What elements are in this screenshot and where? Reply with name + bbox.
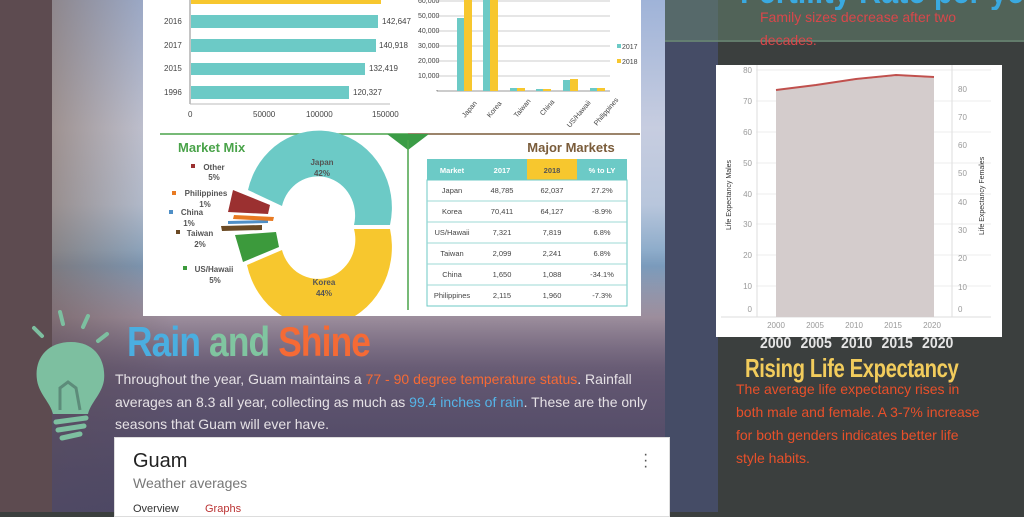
donut chart: market mix: China: [181, 208, 204, 217]
weather card: Weather averages: [133, 475, 247, 491]
donut chart: market mix: 42%: [314, 169, 330, 178]
table: major markets: Major Markets: [527, 140, 615, 155]
weather card: Guam: [133, 450, 187, 472]
table: major markets: 1,650: [493, 270, 511, 279]
column chart: major markets: China: [539, 99, 556, 117]
weather card: ·: [643, 446, 648, 463]
column chart: major markets: -: [436, 88, 439, 95]
donut chart: market mix: Philippines: [185, 189, 228, 198]
table: major markets: 2,115: [493, 291, 511, 300]
bar chart: arrivals by year: 100000: [306, 110, 333, 119]
table: major markets: 7,819: [543, 228, 561, 237]
left strip: [0, 0, 52, 512]
table: major markets: -34.1%: [590, 270, 614, 279]
column chart: major markets: 2018: [622, 59, 638, 66]
table: major markets: 62,037: [541, 186, 563, 195]
table: major markets: 2,241: [543, 249, 561, 258]
donut chart: market mix: 5%: [209, 276, 221, 285]
column chart: major markets: Korea: [486, 100, 504, 119]
background beach photo: [52, 0, 665, 512]
table: major markets: 7,321: [493, 228, 511, 237]
donut chart: market mix: Korea: [313, 278, 336, 287]
table: major markets: China: [442, 270, 463, 279]
table: major markets: 70,411: [491, 207, 513, 216]
chart: life expectancy: 40: [958, 198, 967, 207]
text: life expectancy description: style habits.: [736, 450, 810, 466]
bar chart: arrivals by year: [164, 0, 411, 119]
column chart: major markets: 2017: [622, 44, 638, 51]
donut chart: market mix: 5%: [208, 173, 220, 182]
text: life expectancy description: both male and female. A 3-7% increase: [736, 404, 980, 420]
table: major markets: -7.3%: [592, 291, 612, 300]
table: major markets: 2018: [544, 166, 560, 175]
column chart: major markets: 20,000: [418, 58, 440, 65]
bar chart: arrivals by year: 2017: [164, 41, 182, 50]
panel: tourism charts: [143, 0, 641, 316]
chart: life expectancy: 70: [743, 97, 753, 106]
chart: life expectancy: Life Expectancy Females: [979, 156, 986, 235]
weather card: Graphs: [205, 503, 241, 515]
chart: life expectancy: 10: [958, 283, 967, 292]
chart: life expectancy: 60: [743, 128, 753, 137]
chart: life expectancy: 2015: [884, 321, 902, 330]
table: major markets: 2017: [494, 166, 510, 175]
text: life expectancy description: [736, 381, 980, 466]
table: major markets: Market: [440, 166, 465, 175]
donut chart: market mix: Other: [203, 163, 225, 172]
text: life expectancy description: The average life expectancy rises in: [736, 381, 959, 397]
table: major markets: US/Hawaii: [434, 228, 470, 237]
header band: [665, 0, 1024, 42]
chart: life expectancy: 0: [958, 305, 963, 314]
table: major markets: Taiwan: [440, 249, 464, 258]
chart: life expectancy: 20: [743, 251, 753, 260]
chart: life expectancy: 50: [958, 169, 967, 178]
donut chart: market mix: 1%: [183, 219, 195, 228]
chart: life expectancy: 2005: [806, 321, 824, 330]
donut chart: market mix: US/Hawaii: [195, 265, 233, 274]
chart: life expectancy: 10: [743, 282, 753, 291]
table: major markets: 6.8%: [593, 228, 611, 237]
table: major markets: 1,960: [543, 291, 561, 300]
chart: life expectancy: 2000: [767, 321, 785, 330]
table: major markets: Philippines: [434, 291, 470, 300]
table: major markets: Korea: [442, 207, 463, 216]
table: major markets: 1,088: [543, 270, 561, 279]
bar chart: arrivals by year: 142,647: [382, 17, 411, 26]
bar chart: arrivals by year: 120,327: [353, 88, 382, 97]
chart: life expectancy: Life Expectancy Males: [726, 159, 733, 230]
donut chart: market mix: 2%: [194, 240, 206, 249]
icon: lightbulb: [32, 310, 110, 440]
weather card: ·: [643, 458, 648, 475]
text: life expectancy description: for both genders indicates better life: [736, 427, 959, 443]
column chart: major markets: Taiwan: [513, 98, 533, 119]
table: major markets: [427, 140, 627, 306]
weather card: Overview: [133, 503, 179, 515]
title: rain and shine: Rain and Shine: [127, 318, 370, 365]
donut chart: market mix: Market Mix: [178, 140, 246, 155]
bar chart: arrivals by year: 2016: [164, 17, 182, 26]
column chart: major markets: 10,000: [418, 73, 440, 80]
bar chart: arrivals by year: 140,918: [379, 41, 408, 50]
text: family sizes: Family sizes decrease after two: [760, 9, 956, 25]
chart: life expectancy: 80: [958, 85, 967, 94]
chart: life expectancy: 80: [743, 66, 753, 75]
text: family sizes: decades.: [760, 32, 817, 48]
bar chart: arrivals by year: 1996: [164, 88, 182, 97]
chart: life expectancy: 70: [958, 113, 967, 122]
chart: life expectancy: 40: [743, 190, 753, 199]
donut chart: market mix: 1%: [199, 200, 211, 209]
chart: life expectancy: 30: [743, 220, 753, 229]
table: major markets: Japan: [442, 186, 462, 195]
weather card: ·: [643, 452, 648, 469]
chart: life expectancy: 2010: [845, 321, 863, 330]
text: family sizes: [760, 9, 956, 48]
bar chart: arrivals by year: 2015: [164, 64, 182, 73]
column chart: major markets: [418, 0, 638, 129]
donut chart: market mix: [169, 131, 392, 327]
chart: life expectancy: 60: [958, 141, 967, 150]
table: major markets: 2,099: [493, 249, 511, 258]
column chart: major markets: 30,000: [418, 43, 440, 50]
title: rising life expectancy: Rising Life Expectancy: [745, 353, 958, 383]
column chart: major markets: Japan: [461, 100, 479, 119]
column chart: major markets: 40,000: [418, 28, 440, 35]
axis years label: 2000 2005 2010 2015 2020: [760, 335, 953, 352]
table: major markets: 48,785: [491, 186, 513, 195]
right slate column: [665, 0, 718, 512]
chart: life expectancy: 0: [748, 305, 753, 314]
bar chart: arrivals by year: 150000: [372, 110, 399, 119]
donut chart: market mix: 44%: [316, 289, 332, 298]
column chart: major markets: US/Hawaii: [566, 99, 593, 129]
bar chart: arrivals by year: 0: [188, 110, 193, 119]
text: climate description: Throughout the year, Guam maintains a 77 - 90 degree temperature status. Rainfall averages an 8.3 all year, collecting as much as 99.4 inches of rain. These are the only seasons that Guam will ever have.: [115, 371, 647, 432]
chart: life expectancy: 50: [743, 159, 753, 168]
column chart: major markets: Philippines: [593, 96, 621, 127]
right dark panel: [718, 0, 1024, 512]
chart: life expectancy: 2020: [923, 321, 941, 330]
weather card: [114, 437, 670, 517]
table: major markets: 64,127: [541, 207, 563, 216]
bar chart: arrivals by year: 50000: [253, 110, 276, 119]
donut chart: market mix: Taiwan: [187, 229, 213, 238]
chart: life expectancy: 20: [958, 254, 967, 263]
table: major markets: 6.8%: [593, 249, 611, 258]
chart: life expectancy: 30: [958, 226, 967, 235]
donut chart: market mix: Japan: [310, 158, 334, 167]
table: major markets: 27.2%: [591, 186, 613, 195]
column chart: major markets: 50,000: [418, 13, 440, 20]
table: major markets: -8.9%: [592, 207, 612, 216]
bar chart: arrivals by year: 132,419: [369, 64, 398, 73]
table: major markets: % to LY: [589, 166, 615, 175]
chart: life expectancy: [716, 65, 1002, 337]
